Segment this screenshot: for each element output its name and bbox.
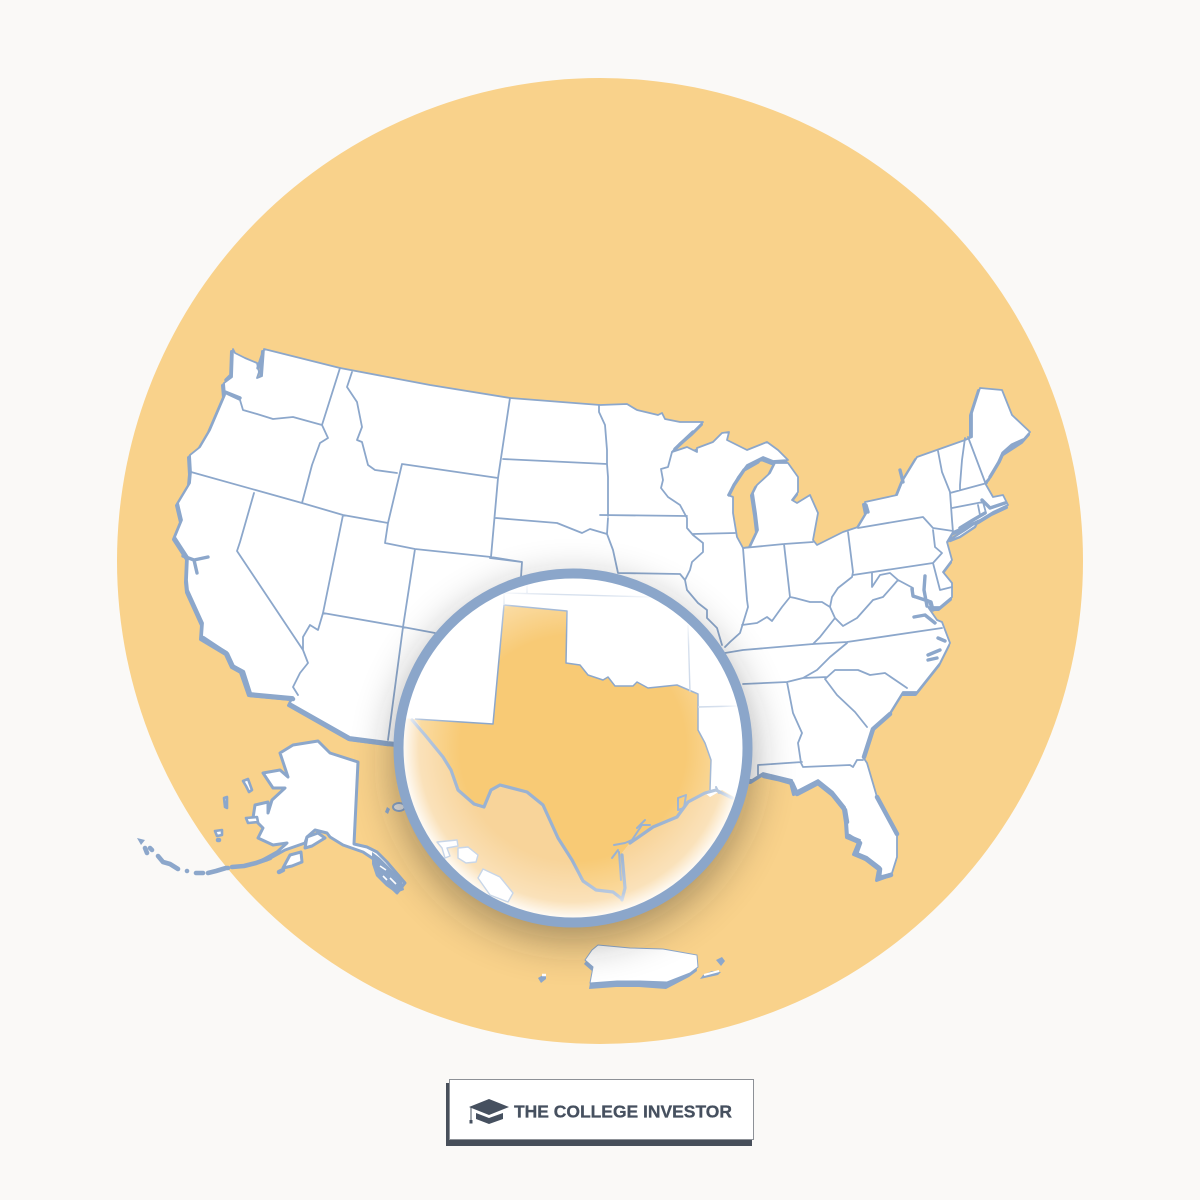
map: contiguous United States bbox=[174, 349, 1030, 880]
Long Island bbox=[949, 521, 978, 541]
logo wordmark: THE COLLEGE INVESTOR bbox=[514, 1102, 732, 1122]
lens ring bbox=[398, 574, 748, 922]
magnifying lens over Texas bbox=[398, 574, 760, 930]
thick Gulf, Florida and southern border coast bbox=[203, 638, 897, 878]
state borders bbox=[191, 368, 987, 775]
neighboring state outlines bbox=[415, 605, 711, 790]
coastal inlets and bays bbox=[183, 356, 1023, 660]
rim fade bbox=[402, 577, 744, 919]
logo: The College Investor bbox=[446, 1080, 754, 1146]
orange background circle bbox=[117, 78, 1083, 1044]
gulf and Mexico background bbox=[404, 718, 735, 918]
icon: graduation cap bbox=[469, 1099, 509, 1124]
small islands bbox=[437, 840, 513, 902]
Texas bbox=[415, 605, 711, 900]
Rio Grande and coast lines bbox=[412, 720, 732, 900]
map: Alaska bbox=[137, 741, 405, 893]
magnifier shadow bbox=[395, 584, 751, 940]
map: Puerto Rico bbox=[538, 945, 725, 989]
